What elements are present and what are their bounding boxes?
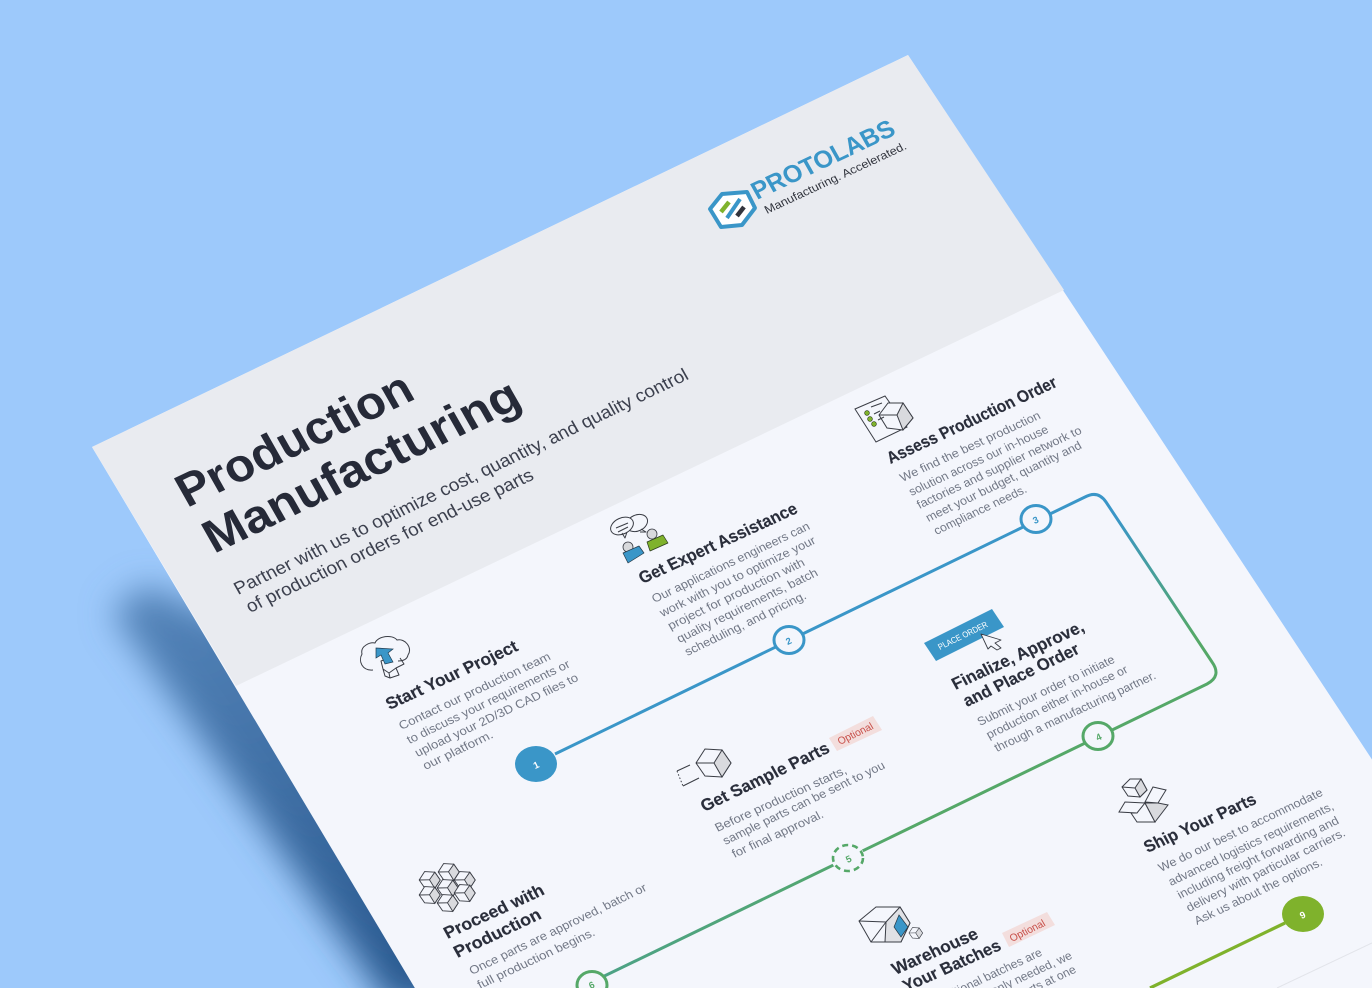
body text bbox=[1156, 785, 1348, 928]
optional badge bbox=[829, 716, 882, 751]
logo hexagon bbox=[710, 192, 755, 227]
green final line bbox=[1150, 923, 1285, 988]
body text: sample parts can be sent to you bbox=[720, 758, 887, 848]
body text: Submit your order to initiate bbox=[975, 652, 1117, 729]
step 1 marker bbox=[515, 746, 557, 782]
body text: production either in-house or bbox=[984, 662, 1130, 742]
panel: warehouse your batches bbox=[859, 907, 1079, 988]
step 9 marker: 9 bbox=[1298, 910, 1308, 922]
body text: quality requirements, batch bbox=[674, 566, 820, 646]
body text: advanced logistics requirements, bbox=[1166, 799, 1336, 889]
step 9 marker bbox=[1282, 896, 1324, 932]
optional badge: Optional bbox=[835, 721, 876, 748]
step 3 marker: 3 bbox=[1031, 515, 1041, 527]
body text: scheduling, and pricing. bbox=[682, 589, 809, 659]
step 2 marker: 2 bbox=[784, 636, 794, 648]
body text: for final approval. bbox=[729, 807, 826, 861]
body text: work with you to optimize your bbox=[656, 533, 818, 620]
heading: Ship Your Parts bbox=[1140, 790, 1260, 857]
step 3 marker bbox=[1021, 506, 1051, 532]
body text: upload your 2D/3D CAD files to bbox=[412, 670, 581, 760]
optional badge: Optional bbox=[1007, 918, 1048, 945]
header band bbox=[92, 55, 1064, 686]
panel: finalize approve and place order bbox=[924, 609, 1158, 755]
body text: to discuss your requirements or bbox=[404, 657, 572, 747]
optional badge bbox=[1002, 912, 1055, 947]
body text: project for production with bbox=[665, 555, 807, 633]
icon: checklist and cube bbox=[855, 396, 913, 442]
heading: Proceed with bbox=[440, 881, 548, 943]
faint footer rule bbox=[1277, 943, 1372, 988]
icon: place order button: PLACE ORDER bbox=[936, 619, 990, 652]
subtitle: Partner with us to optimize cost, quantity, and quality control bbox=[230, 365, 692, 598]
icon: warehouse box bbox=[859, 907, 923, 942]
step 6 marker bbox=[577, 972, 607, 988]
heading: Get Expert Assistance bbox=[635, 499, 801, 588]
icon: open shipping box bbox=[1119, 779, 1168, 822]
panel: get sample parts bbox=[677, 716, 887, 861]
logo wordmark: PROTOLABS bbox=[746, 115, 900, 205]
icon: place order button bbox=[924, 609, 1004, 661]
step 4 marker bbox=[1083, 722, 1113, 750]
body text: Ask us about the options. bbox=[1192, 855, 1325, 928]
body text: through a manufacturing partner. bbox=[992, 669, 1158, 755]
body text: our platform. bbox=[420, 728, 496, 773]
step 5 marker, dashed: 5 bbox=[844, 853, 854, 866]
body text: solution across our in-house bbox=[906, 422, 1051, 499]
body text: We do our best to accommodate bbox=[1156, 785, 1326, 875]
step 5 marker, dashed bbox=[831, 844, 865, 872]
subtitle: of production orders for end-use parts bbox=[242, 465, 537, 616]
step 2 marker bbox=[774, 626, 804, 654]
heading: and Place Order bbox=[960, 640, 1083, 710]
icon: honeycomb of cubes bbox=[419, 864, 475, 911]
title: Production bbox=[166, 361, 422, 517]
body text: Our applications engineers can bbox=[649, 519, 812, 606]
body text: factories and supplier network to bbox=[914, 423, 1084, 512]
panel: assess production order bbox=[855, 373, 1084, 538]
heading: Finalize, Approve, bbox=[948, 617, 1087, 694]
body text bbox=[396, 649, 581, 773]
panel: get expert assistance bbox=[608, 499, 820, 659]
step 1 marker: 1 bbox=[532, 759, 542, 772]
icon: two people talking bbox=[608, 511, 668, 563]
logo bbox=[710, 115, 909, 227]
icon: cloud upload bbox=[360, 636, 410, 678]
body text: Contact our production team bbox=[396, 649, 553, 733]
body text: delivery with particular carriers. bbox=[1183, 826, 1348, 915]
body text: meet your budget, quantity and bbox=[923, 438, 1084, 525]
body text bbox=[897, 408, 1084, 538]
body text: We find the best production bbox=[897, 408, 1043, 485]
logo tagline: Manufacturing. Accelerated. bbox=[763, 141, 909, 217]
panel: start your project bbox=[360, 636, 581, 773]
heading: Production bbox=[450, 905, 545, 961]
heading: Warehouse bbox=[888, 924, 981, 979]
step 4 marker: 4 bbox=[1094, 731, 1104, 744]
body text: including freight forwarding and bbox=[1175, 813, 1341, 902]
title: Manufacturing bbox=[193, 368, 529, 563]
body text: Before production starts, bbox=[712, 763, 849, 835]
heading: Start Your Project bbox=[382, 637, 522, 714]
process path connector bbox=[555, 494, 1285, 988]
icon: sample cube bbox=[677, 749, 731, 786]
heading: Assess Production Order bbox=[883, 373, 1061, 468]
body text: compliance needs. bbox=[931, 482, 1029, 538]
heading: Get Sample Parts bbox=[697, 739, 833, 815]
panel: ship your parts bbox=[1119, 779, 1348, 928]
body text: Once parts are approved, batch or bbox=[467, 881, 649, 978]
page shadow bbox=[112, 585, 520, 988]
panel: proceed with production bbox=[419, 864, 649, 988]
body text bbox=[649, 519, 820, 659]
